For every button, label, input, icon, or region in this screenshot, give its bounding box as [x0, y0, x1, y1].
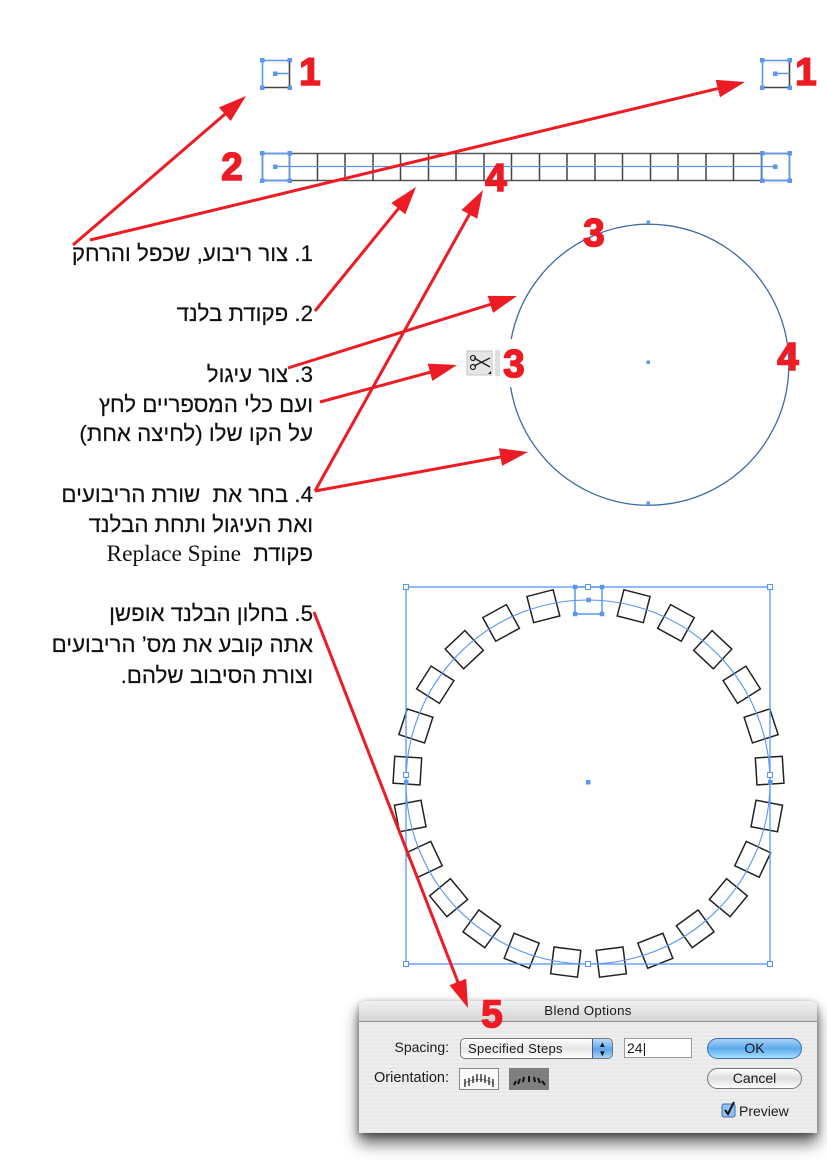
dropdown stepper: ▲ [598, 1040, 607, 1049]
step 4 text [61, 482, 313, 567]
dialog title bar [359, 1001, 817, 1022]
step 3 text: ועם כלי המספריים לחץ [99, 392, 313, 416]
step 3 text [79, 362, 313, 446]
red step numbers: 3 [503, 343, 525, 386]
Cancel button: Cancel [733, 1070, 776, 1086]
arrow: step 2 to row [315, 187, 416, 311]
step 2 text: 2. פקודת בלנד [177, 301, 313, 326]
ring of blended squares [393, 590, 784, 977]
red step numbers: 1 [795, 51, 817, 94]
orientation button: aligned to path [509, 1068, 549, 1090]
selection outline and spine circle [404, 584, 772, 966]
step 4 text: פקודת Replace Spine [107, 541, 313, 567]
Cancel button [707, 1068, 802, 1089]
spacing dropdown [460, 1038, 613, 1059]
single square, left [260, 58, 292, 90]
step 4 text: 4. בחר את שורת הריבועים [61, 482, 313, 507]
preview checkbox [722, 1102, 736, 1118]
step 4 text: ואת העיגול ותחת הבלנד [89, 512, 313, 536]
steps input [624, 1038, 692, 1058]
preview label: Preview [739, 1103, 789, 1119]
red step numbers [221, 51, 817, 1036]
red step numbers: 2 [221, 146, 243, 189]
single square, right [760, 58, 792, 90]
icon: scissors tool [467, 350, 500, 376]
step 5 text: 5. בחלון הבלנד אופשן [109, 601, 313, 626]
arrow: step 5 to dialog [314, 612, 468, 1008]
step 5 text [52, 601, 313, 688]
orientation button: aligned to page [459, 1068, 499, 1090]
spacing label: Spacing: [395, 1039, 449, 1055]
dropdown stepper: ▼ [598, 1049, 607, 1058]
orientation label: Orientation: [374, 1070, 449, 1086]
arrow: step 4 to row [315, 190, 483, 491]
dropdown stepper [592, 1039, 612, 1058]
arrow: step 3 to circle [288, 296, 517, 368]
blended row of squares [260, 151, 792, 183]
dialog title bar: Blend Options [544, 1003, 632, 1018]
step 5 text: אתה קובע את מס’ הריבועים [52, 632, 313, 657]
steps input: 24| [627, 1040, 646, 1056]
step 3 text: 3. צור עיגול [207, 362, 313, 387]
step 1 text: 1. צור ריבוע, שכפל והרחק [72, 241, 313, 266]
red step numbers: 5 [481, 993, 503, 1036]
dialog: Blend Options [359, 1001, 817, 1133]
arrow: step 1 to right square [90, 82, 745, 240]
arrow: step 1 to left square [73, 96, 246, 245]
arrow: step 4 to circle [315, 452, 528, 491]
red step numbers: 3 [583, 212, 605, 255]
OK button [707, 1038, 802, 1059]
cut circle [511, 220, 790, 505]
step 5 text: וצורת הסיבוב שלהם. [121, 663, 313, 688]
red step numbers: 4 [777, 336, 799, 379]
OK button: OK [744, 1040, 765, 1056]
red step numbers: 4 [485, 157, 507, 200]
spacing dropdown: Specified Steps [468, 1041, 563, 1056]
arrow: step 3 to scissors [320, 365, 457, 402]
step 3 text: על הקו שלו (לחיצה אחת) [79, 421, 313, 446]
red step numbers: 1 [299, 51, 321, 94]
